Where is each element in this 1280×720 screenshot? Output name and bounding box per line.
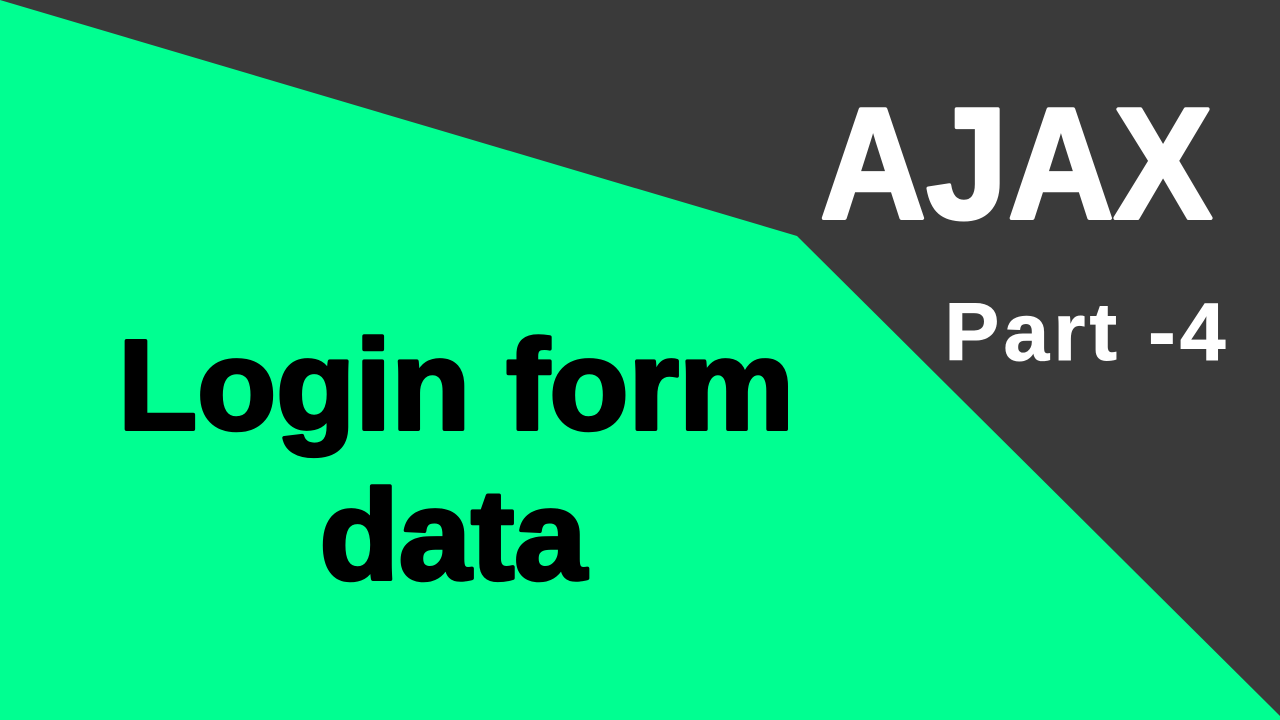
- title line: Login form: Login form: [118, 314, 794, 457]
- heading: AJAX: AJAX: [820, 76, 1212, 252]
- subheading: Part -4: Part -4: [944, 287, 1226, 378]
- title line: data: data: [320, 464, 587, 607]
